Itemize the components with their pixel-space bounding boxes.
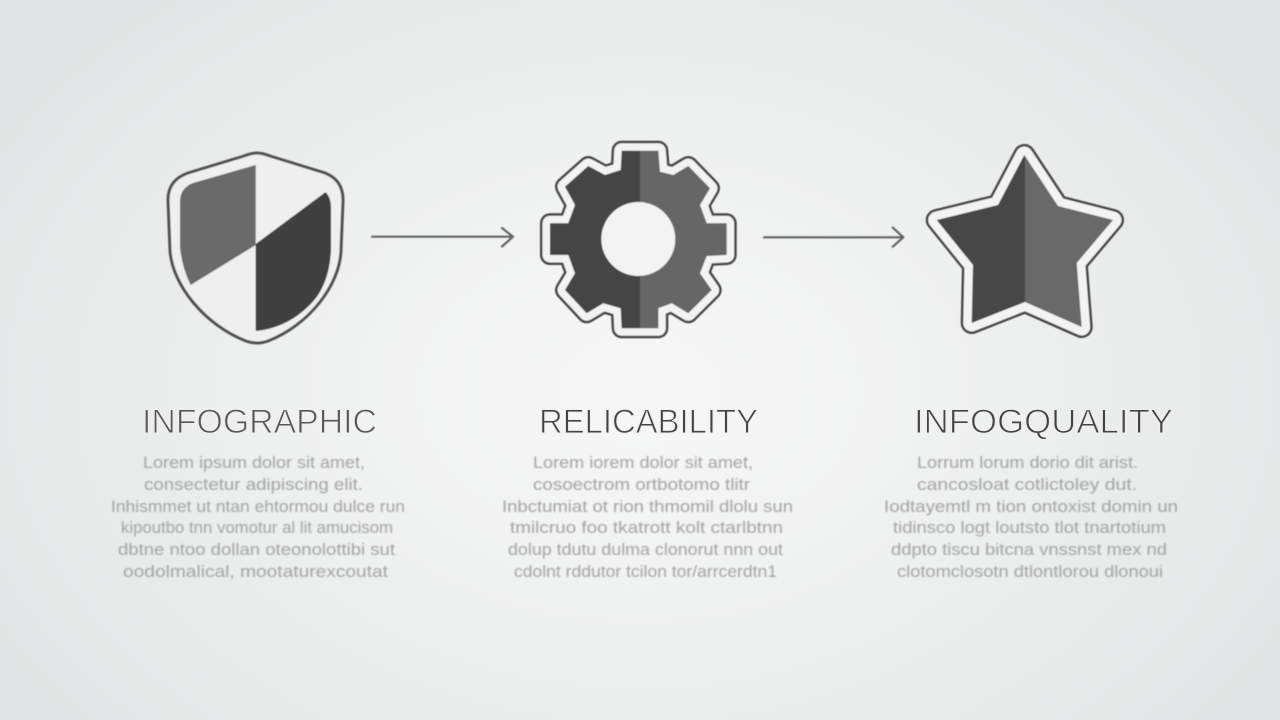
text block: column 1: consectetur adipiscing elit. [144, 475, 363, 494]
arrow: shield to gear [372, 228, 513, 246]
icon: gear [550, 151, 727, 328]
text block: column 1: kipoutbo tnn vomotur al lit amucisom [121, 518, 393, 537]
icon: star [937, 155, 1113, 327]
text block: column 2: Lorem iorem dolor sit amet, [533, 453, 753, 472]
icon: shield [168, 153, 343, 343]
text block: column 1: dbtne ntoo dollan oteonolottibi sut [118, 540, 395, 559]
arrow: gear to star [764, 228, 903, 247]
text block: column 1: Lorem ipsum dolor sit amet, [143, 453, 365, 472]
text block: column 3: tidinsco logt loutsto tlot tnartotium [893, 518, 1166, 537]
text block: column 3: clotomclosotn dtlontlorou dlonoui [897, 562, 1163, 581]
text block: column 2: Inbctumiat ot rion thmomil dlolu sun [502, 497, 793, 516]
heading: relicability: RELICABILITY [539, 403, 758, 441]
text block: column 1 [111, 453, 405, 581]
text block: column 2: cosoectrom ortbotomo tlitr [533, 475, 750, 494]
text block: column 1: Inhismmet ut ntan ehtormou dulce run [111, 497, 405, 516]
text block: column 3: ddpto tiscu bitcna vnssnst mex nd [891, 540, 1167, 559]
text block: column 3 [884, 453, 1178, 581]
heading: infogquality: INFOGQUALITY [914, 403, 1173, 441]
heading: infographic: INFOGRAPHIC [142, 403, 377, 441]
text block: column 2 [502, 453, 793, 581]
text block: column 2: cdolnt rddutor tcilon tor/arrcerdtn1 [514, 562, 777, 581]
text block: column 3: Lorrum lorum dorio dit arist. [917, 453, 1138, 472]
text block: column 1: oodolmalical, mootaturexcoutat [123, 562, 388, 581]
text block: column 2: dolup tdutu dulma clonorut nnn out [508, 540, 783, 559]
text block: column 3: cancosloat cotlictoley dut. [917, 475, 1137, 494]
text block: column 3: Iodtayemtl m tion ontoxist domin un [884, 497, 1178, 516]
text block: column 2: tmilcruo foo tkatrott kolt ctarlbtnn [510, 518, 783, 537]
